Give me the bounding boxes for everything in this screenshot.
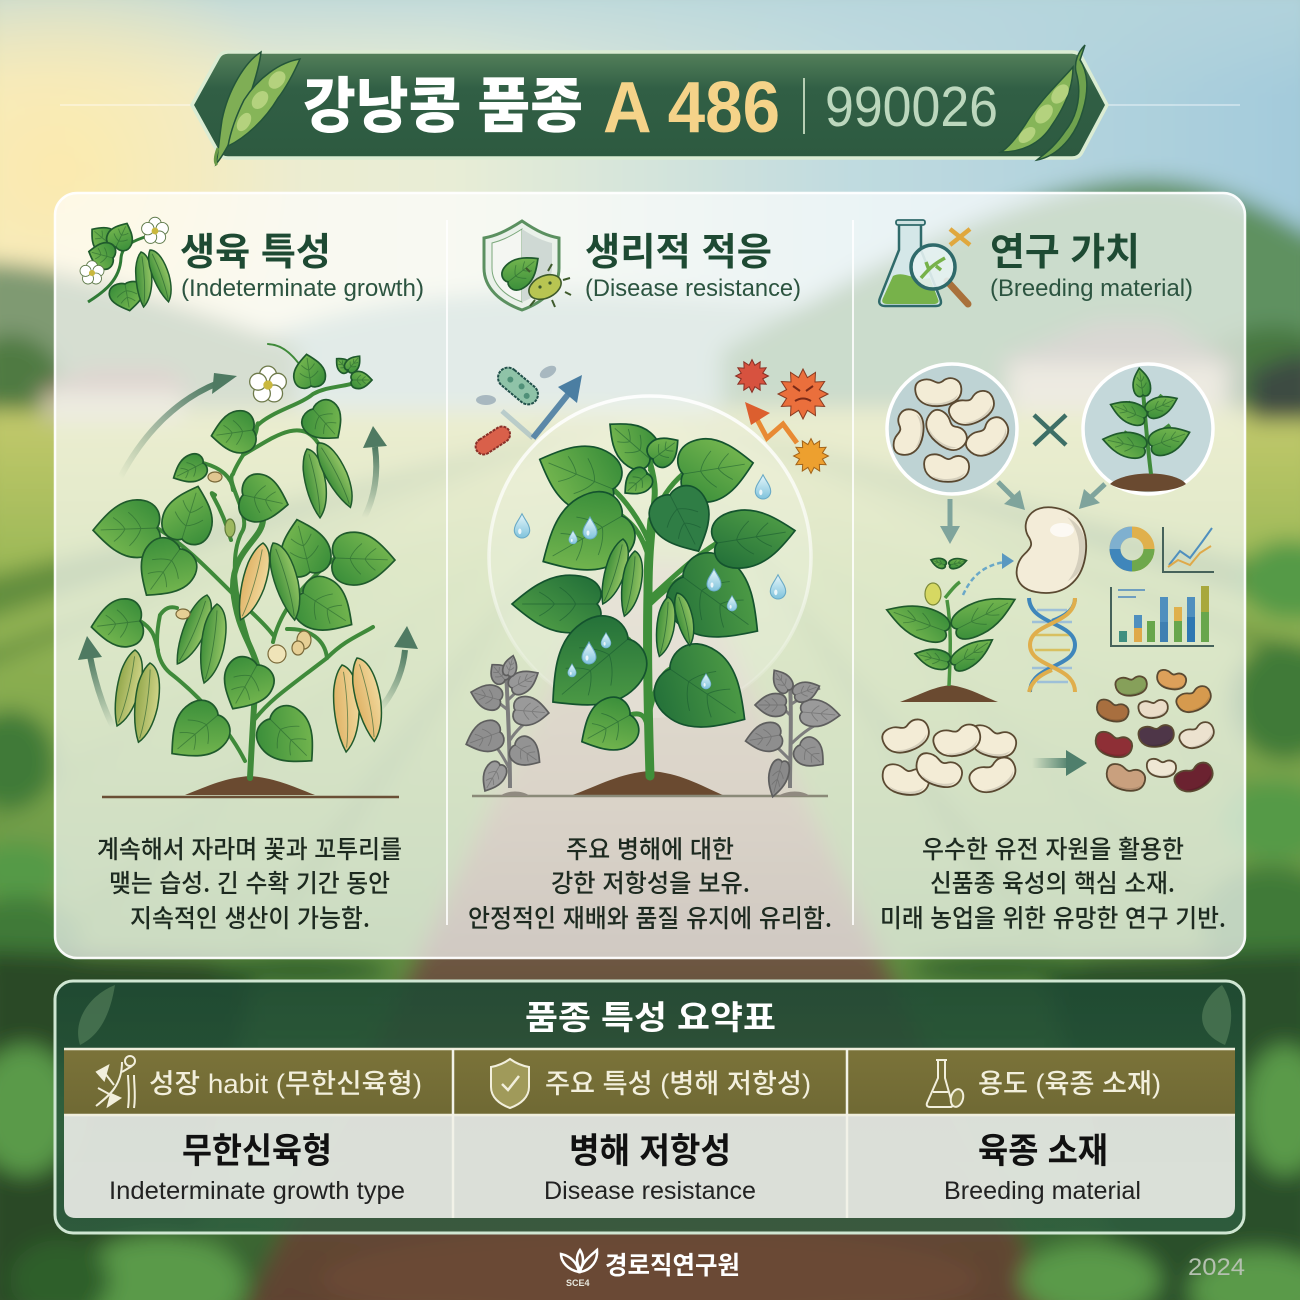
value: disease resistance: 병해 저항성	[569, 1123, 731, 1174]
accession number: 990026	[825, 75, 998, 139]
text block: physiology description: 강한 저항성을 보유.	[551, 864, 750, 900]
icons: water droplets	[514, 475, 786, 689]
column: breeding	[879, 220, 1226, 935]
illustration: cream bean pile	[880, 716, 1021, 799]
panel: summary table	[55, 981, 1244, 1233]
subheading: research value: (Breeding material)	[990, 275, 1193, 302]
illustration: seedling with data arrow	[881, 553, 1022, 702]
icon: shield with leaf and microbe	[484, 221, 571, 310]
illustration: large bean	[1013, 503, 1093, 599]
heading: growth: 생육 특성	[180, 221, 331, 276]
arrows: upward growth	[78, 373, 418, 727]
column header: key trait: 주요 특성 (병해 저항성)	[545, 1069, 811, 1099]
chart: line	[1163, 527, 1214, 572]
icon: bean vine	[80, 217, 179, 314]
text block: breeding description	[880, 830, 1226, 935]
divider	[803, 78, 805, 134]
icon: flask and magnifier	[879, 220, 970, 306]
text block: growth description: 계속해서 자라며 꽃과 꼬투리를	[97, 830, 402, 866]
illustration: plant parent circle	[1083, 364, 1213, 494]
text block: growth description: 맺는 습성. 긴 수확 기간 동안	[109, 864, 390, 900]
label: growth type: Indeterminate growth type	[109, 1177, 405, 1205]
table heading: 품종 특성 요약표	[525, 991, 776, 1039]
illustration: DNA helix	[1029, 598, 1075, 692]
column: growth	[78, 217, 424, 935]
table: header row	[64, 1049, 1235, 1115]
table: value row	[64, 1049, 1235, 1218]
microbes and deflection arrows	[473, 360, 828, 473]
icon: vine outline	[96, 1056, 135, 1108]
text block: breeding description: 미래 농업을 위한 유망한 연구 기반.	[880, 899, 1226, 935]
value: breeding material: 육종 소재	[978, 1123, 1108, 1174]
text block: growth description	[97, 830, 402, 935]
illustration: seed parent circle	[887, 364, 1017, 494]
heading: physiology: 생리적 적응	[585, 221, 772, 276]
subheading: growth: (Indeterminate growth)	[181, 275, 424, 302]
title code: A 486	[603, 68, 780, 148]
title banner	[60, 45, 1240, 165]
label: breeding material: Breeding material	[944, 1177, 1141, 1205]
year: 2024	[1188, 1254, 1245, 1281]
illustration: diverse coloured beans	[1092, 669, 1218, 797]
column: disease resistance	[461, 221, 841, 935]
chart: bars	[1111, 586, 1214, 646]
icon: shield check	[491, 1059, 529, 1108]
arrows: breeding flow	[940, 482, 1105, 544]
column header: growth habit: 성장 habit (무한신육형)	[149, 1069, 422, 1099]
illustration: healthy plant with droplets	[472, 409, 828, 796]
text block: breeding description: 우수한 유전 자원을 활용한	[922, 830, 1184, 866]
illustration: protective bubble	[489, 396, 811, 718]
value: growth type: 무한신육형	[182, 1123, 332, 1174]
arrow: to diverse varieties	[1032, 750, 1087, 776]
title text: 강낭콩 품종	[303, 58, 583, 145]
label: disease resistance: Disease resistance	[544, 1177, 756, 1205]
illustration: wilted grey plants	[461, 654, 841, 799]
text block: growth description: 지속적인 생산이 가능함.	[130, 899, 370, 935]
panel: three column card	[55, 193, 1245, 958]
footer logo	[561, 1246, 740, 1288]
illustration: climbing bean plant	[88, 344, 399, 797]
subheading: physiology: (Disease resistance)	[585, 275, 801, 302]
symbol: cross	[1034, 415, 1066, 445]
text block: physiology description: 안정적인 재배와 품질 유지에 유리함.	[468, 899, 832, 935]
icon: left bean pods	[215, 52, 300, 165]
column header: use: 용도 (육종 소재)	[978, 1069, 1161, 1099]
icon: flask outline	[927, 1060, 965, 1108]
sprout caption: SCE4	[566, 1278, 590, 1288]
decor: corner leaves	[78, 985, 1231, 1045]
icon: right bean pods	[1001, 45, 1087, 160]
icon: sprout mark	[561, 1250, 597, 1272]
text block: physiology description: 주요 병해에 대한	[566, 830, 734, 866]
heading: research value: 연구 가치	[990, 221, 1140, 276]
organisation name: 경로직연구원	[605, 1246, 740, 1282]
text block: physiology description	[468, 830, 832, 935]
text block: breeding description: 신품종 육성의 핵심 소재.	[930, 864, 1175, 900]
chart: donut	[1115, 532, 1149, 566]
